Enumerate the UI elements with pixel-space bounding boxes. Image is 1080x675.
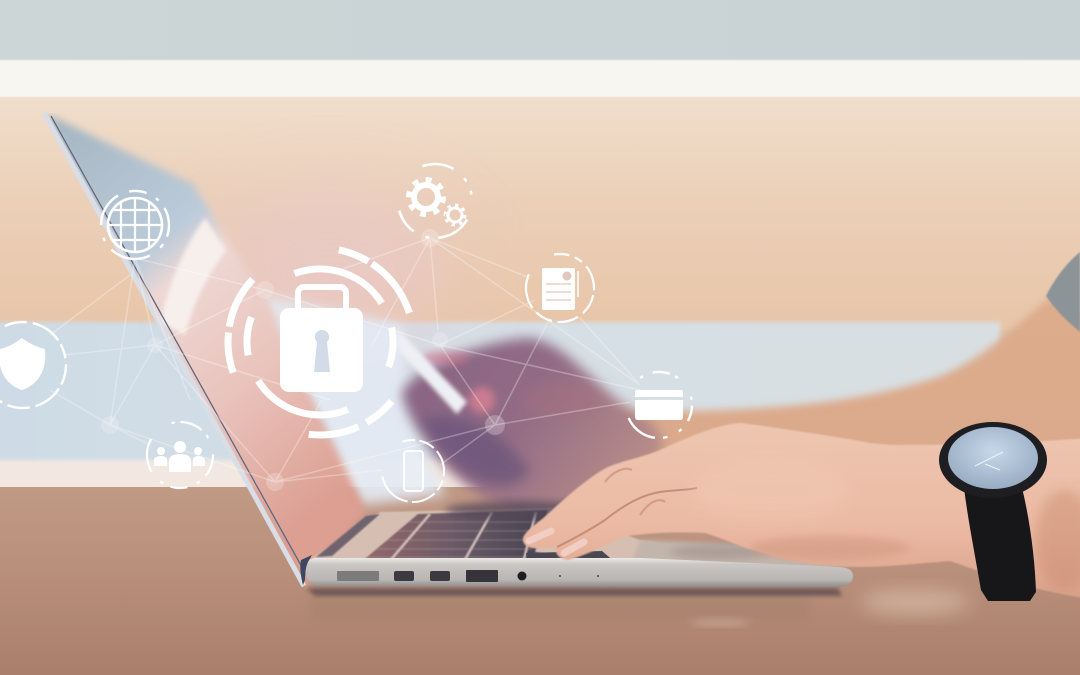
keyboard deck — [310, 501, 850, 570]
icon: globe — [96, 186, 174, 264]
icon: gears — [388, 154, 482, 248]
icon: central padlock with rings — [189, 211, 451, 473]
front hand on the trackpad — [523, 423, 1080, 599]
icon: people group — [140, 415, 220, 495]
pink haze behind lid — [210, 200, 450, 340]
laptop lid with screen reflection — [44, 113, 366, 590]
network lines and nodes — [50, 229, 640, 491]
icon: credit card — [613, 359, 705, 451]
light reflection band right of lid — [262, 295, 445, 505]
icon: shield — [0, 308, 80, 422]
laptop base with ports — [300, 555, 853, 596]
wristwatch — [939, 422, 1047, 601]
blurred hand holding a card — [398, 330, 662, 515]
blurred background forearm and sleeve — [600, 252, 1080, 470]
icon: smartphone — [373, 431, 453, 511]
icon: document — [521, 249, 599, 327]
